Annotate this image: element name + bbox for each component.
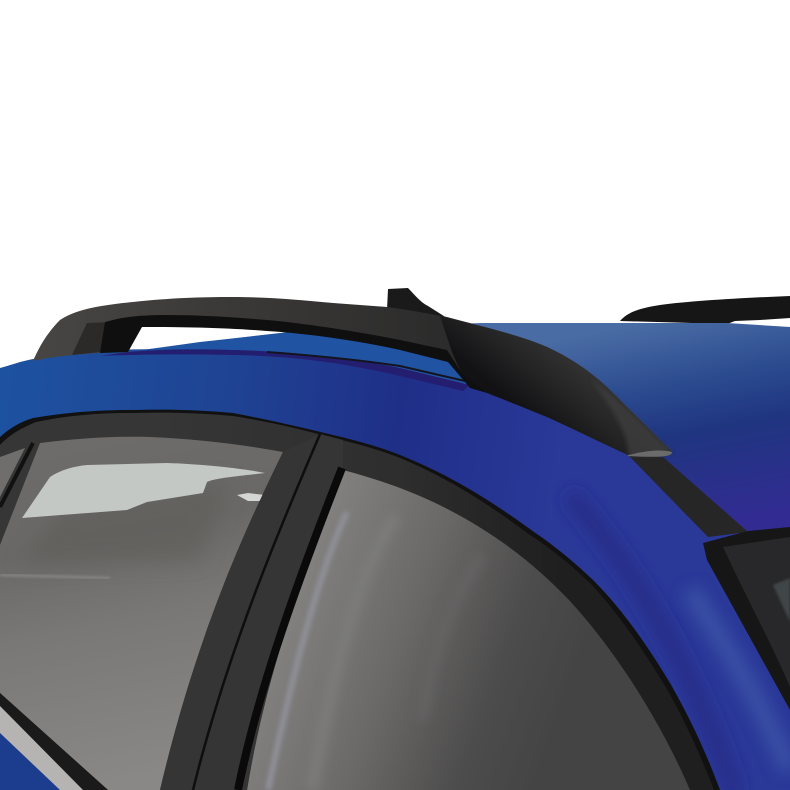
rail underside shadow [100, 315, 487, 393]
front side window glass [247, 470, 690, 790]
window frame surround [0, 410, 720, 790]
antenna [387, 288, 447, 318]
roof panel [128, 323, 790, 540]
near roof rail [33, 297, 672, 457]
light crease band [690, 590, 790, 770]
rail foot inner face [72, 322, 113, 355]
rear windscreen [703, 527, 790, 710]
small quarter glass [0, 448, 25, 497]
rear glass reflection [773, 578, 790, 622]
rail end lighter face [590, 378, 672, 456]
glass pale reflection [268, 512, 347, 790]
quarter divider [0, 443, 33, 507]
lower blue door [0, 733, 60, 790]
reflected rear window highlight [22, 463, 265, 518]
interior reflection line [0, 575, 110, 578]
interior seat shadow [20, 480, 230, 565]
photo: blue car roof with black roof rails [0, 288, 790, 790]
body side panel [0, 349, 790, 790]
dark crease band [570, 495, 735, 790]
rail end tip [628, 451, 672, 457]
frame lighter face [0, 413, 714, 790]
lower left body panel [0, 693, 108, 790]
trim black seam [267, 352, 465, 381]
small highlight [237, 493, 265, 501]
rear glass [723, 537, 790, 687]
roof trim line [100, 349, 470, 391]
rear side window glass [0, 437, 283, 790]
central pillar [160, 434, 343, 790]
second glass streak [312, 516, 396, 790]
pillar black seam [193, 434, 320, 790]
far roof rail [620, 296, 790, 324]
third glass streak [422, 556, 482, 720]
rail end cap [440, 316, 672, 456]
black roof channel strip [628, 455, 748, 537]
near-side roof strip [128, 331, 470, 385]
sill black strip [0, 693, 108, 790]
body side shading [570, 495, 790, 790]
pillar door edge [238, 468, 342, 790]
